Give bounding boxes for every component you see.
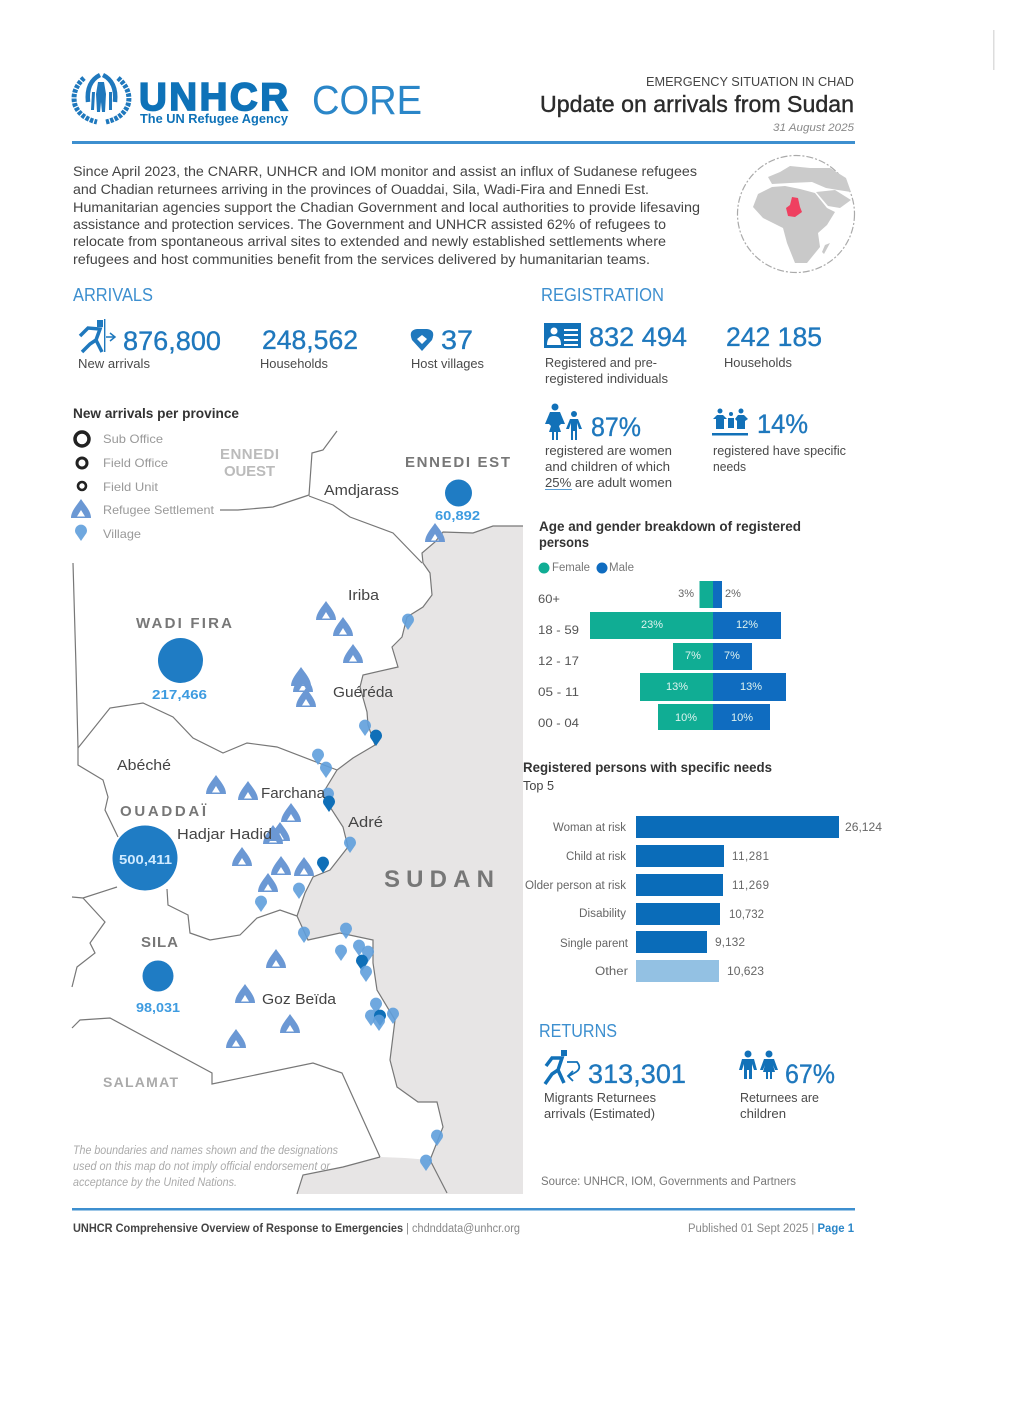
- stat: new arrivals: New arrivals: [78, 357, 150, 371]
- stat: migrants returnees: 313,301: [588, 1059, 686, 1089]
- intro paragraph: refugees and host communities benefit from the services delivered by humanitarian teams.: [73, 252, 650, 267]
- intro paragraph: Since April 2023, the CNARR, UNHCR and IOM monitor and assist an influx of Sudanese refugees: [73, 164, 697, 179]
- stat: registered individuals: [545, 322, 687, 386]
- map disclaimer: [73, 1145, 338, 1189]
- stat: children returnees: Returnees are: [740, 1091, 819, 1105]
- footer: UNHCR Comprehensive Overview of Response to Emergencies | chdnddata@unhcr.org: [73, 1223, 520, 1235]
- icon: returning person: [545, 1050, 579, 1084]
- stat: new arrivals: [78, 326, 221, 371]
- chart title: [523, 759, 772, 793]
- icon: village pin: [411, 329, 433, 351]
- stat: households: Households: [260, 357, 328, 371]
- header: title block: 31 August 2025: [773, 122, 855, 134]
- stat: registered individuals: Registered and pre-: [545, 356, 657, 370]
- stat: households: 248,562: [262, 325, 358, 355]
- stat: migrants returnees: [544, 1059, 686, 1121]
- intro paragraph: assistance and protection services. The Government and UNHCR assisted 62% of refugees to: [73, 217, 666, 232]
- bars: [590, 581, 786, 730]
- heading: RETURNS: [539, 1021, 617, 1041]
- map legend: [71, 432, 215, 541]
- chart title: Registered persons with specific needs: [523, 759, 772, 775]
- icon: UNHCR emblem: [74, 75, 129, 122]
- intro paragraph: and Chadian returnees arriving in the provinces of Ouaddai, Sila, Wadi-Fira and Ennedi Est.: [73, 182, 649, 197]
- category labels: Disability: [579, 908, 626, 920]
- header: title block: [540, 74, 855, 134]
- value labels: 13%: [666, 681, 688, 693]
- stat: host villages: [411, 325, 484, 371]
- chart legend: Female: [552, 562, 590, 574]
- stat: host villages: Host villages: [411, 357, 484, 371]
- map: [71, 405, 523, 1194]
- logo wordmark: UNHCR: [139, 76, 288, 119]
- value labels: 26,124: [845, 822, 883, 834]
- map legend: Field Unit: [103, 480, 159, 494]
- province labels: ENNEDI EST: [405, 454, 511, 471]
- value labels: 12%: [736, 619, 758, 631]
- section: returns: [539, 1021, 835, 1121]
- stat: women and children: 25% are adult women: [545, 476, 672, 490]
- province labels: [103, 446, 511, 1090]
- chart: age and gender breakdown: [538, 518, 801, 730]
- stat: women and children: and children of which: [545, 460, 670, 474]
- value labels: 11,269: [732, 880, 769, 892]
- category labels: [525, 822, 629, 978]
- value labels: [715, 822, 883, 978]
- chart: specific needs: [523, 759, 883, 982]
- chart title: [539, 518, 801, 550]
- chart legend: [538, 562, 634, 574]
- header: UNHCR CORE logo: [74, 75, 422, 126]
- stat: specific needs: 14%: [757, 409, 808, 439]
- stat: registered households: 242 185: [726, 322, 822, 352]
- province bubbles: 60,892: [435, 508, 480, 523]
- map disclaimer: acceptance by the United Nations.: [73, 1177, 237, 1189]
- heading: ARRIVALS: [73, 285, 153, 305]
- stat: migrants returnees: Migrants Returnees: [544, 1091, 656, 1105]
- borders: [72, 431, 523, 1194]
- source note: Source: UNHCR, IOM, Governments and Partners: [541, 1176, 796, 1188]
- stat: children returnees: [740, 1059, 835, 1121]
- icon: ID card: [544, 323, 581, 348]
- stat: specific needs: [713, 409, 846, 474]
- chart title: Age and gender breakdown of registered: [539, 518, 801, 534]
- category labels: Older person at risk: [525, 880, 626, 892]
- province labels: SUDAN: [384, 866, 494, 893]
- city labels: [117, 482, 399, 1008]
- map legend: Refugee Settlement: [103, 503, 215, 517]
- value labels: 11,281: [732, 851, 769, 863]
- icon: specific needs family: [712, 408, 748, 436]
- icon: children: [739, 1050, 778, 1079]
- province bubbles: 217,466: [152, 687, 207, 702]
- stat: migrants returnees: arrivals (Estimated): [544, 1107, 655, 1121]
- value labels: 2%: [725, 588, 741, 600]
- province labels: ENNEDI: [220, 446, 280, 463]
- value labels: 3%: [678, 588, 694, 600]
- province labels: WADI FIRA: [136, 615, 233, 632]
- section: arrivals: [73, 285, 484, 371]
- stat: specific needs: registered have specific: [713, 444, 846, 458]
- footer: Published 01 Sept 2025 | Page 1: [688, 1223, 855, 1235]
- map legend: Sub Office: [103, 432, 163, 446]
- intro paragraph: relocate from spontaneous arrival sites to extended and newly established settlements where: [73, 234, 666, 249]
- stat: specific needs: needs: [713, 460, 746, 474]
- footer rule: [72, 1208, 855, 1210]
- Sudan territory: [297, 526, 523, 1194]
- stat: new arrivals: 876,800: [123, 326, 221, 356]
- value labels: 10%: [731, 712, 753, 724]
- bars: [636, 816, 839, 982]
- stat: registered households: [724, 322, 822, 370]
- age labels: 05 - 11: [538, 685, 579, 699]
- city labels: Goz Beïda: [262, 991, 337, 1008]
- province bubbles: 98,031: [136, 1000, 180, 1015]
- city labels: Abéché: [117, 757, 171, 774]
- value labels: 10,732: [729, 909, 764, 921]
- chart title: Top 5: [523, 779, 554, 793]
- province labels: OUEST: [224, 463, 276, 480]
- city labels: Iriba: [348, 587, 380, 604]
- icon: person crossing border: [80, 319, 115, 352]
- map disclaimer: The boundaries and names shown and the designations: [73, 1145, 338, 1157]
- age labels: 00 - 04: [538, 716, 579, 730]
- value labels: 7%: [685, 650, 701, 662]
- age labels: [538, 592, 579, 730]
- category labels: Single parent: [560, 938, 629, 950]
- value labels: 10,623: [727, 966, 764, 978]
- value labels: 7%: [724, 650, 740, 662]
- stat: host villages: 37: [441, 325, 473, 355]
- value labels: [641, 588, 762, 724]
- chart title: persons: [539, 534, 589, 550]
- category labels: Woman at risk: [553, 822, 626, 834]
- stat: children returnees: children: [740, 1107, 786, 1121]
- globe locator map: [738, 156, 854, 272]
- intro paragraph: Humanitarian agencies support the Chadian Government and local authorities to provide lifesaving: [73, 200, 700, 215]
- category labels: Child at risk: [566, 851, 626, 863]
- intro paragraph: [73, 164, 700, 267]
- logo tagline: The UN Refugee Agency: [140, 111, 289, 126]
- stat: registered individuals: registered individuals: [545, 372, 668, 386]
- header: title block: Update on arrivals from Sudan: [540, 91, 854, 117]
- age labels: 18 - 59: [538, 623, 579, 637]
- province labels: SILA: [141, 934, 179, 951]
- stat: households: [260, 325, 358, 371]
- value labels: 10%: [675, 712, 697, 724]
- city labels: Guéréda: [333, 684, 394, 701]
- value labels: 23%: [641, 619, 663, 631]
- age labels: 60+: [538, 592, 560, 606]
- villages: [255, 614, 443, 1171]
- chart legend: Male: [609, 562, 634, 574]
- value labels: 13%: [740, 681, 762, 693]
- city labels: Hadjar Hadid: [177, 826, 272, 843]
- age labels: 12 - 17: [538, 654, 579, 668]
- stat: women and children: [545, 412, 672, 490]
- value labels: 9,132: [715, 937, 745, 949]
- settlements: [206, 523, 445, 1048]
- province bubbles: [112, 480, 480, 1015]
- Chad highlighted: [786, 197, 802, 217]
- section: registration: [541, 285, 846, 490]
- map disclaimer: used on this map do not imply official endorsement or: [73, 1161, 331, 1173]
- heading: REGISTRATION: [541, 285, 664, 305]
- province labels: OUADDAÏ: [120, 803, 207, 820]
- stat: registered individuals: 832 494: [589, 322, 687, 352]
- map legend: Village: [103, 527, 141, 541]
- stat: registered households: Households: [724, 356, 792, 370]
- icon: woman and child: [545, 404, 582, 440]
- province labels: SALAMAT: [103, 1074, 179, 1090]
- logo CORE: CORE: [312, 77, 422, 123]
- footer: [73, 1223, 855, 1235]
- category labels: Other: [595, 966, 628, 978]
- city labels: Amdjarass: [324, 482, 399, 499]
- stat: women and children: 87%: [591, 412, 641, 442]
- stat: children returnees: 67%: [785, 1059, 835, 1089]
- map title: New arrivals per province: [73, 405, 239, 421]
- stat: women and children: registered are women: [545, 444, 672, 458]
- city labels: Adré: [348, 814, 383, 831]
- province bubbles: 500,411: [119, 852, 172, 867]
- map legend: Field Office: [103, 456, 168, 470]
- city labels: Farchana: [261, 785, 326, 802]
- header: title block: EMERGENCY SITUATION IN CHAD: [646, 74, 854, 89]
